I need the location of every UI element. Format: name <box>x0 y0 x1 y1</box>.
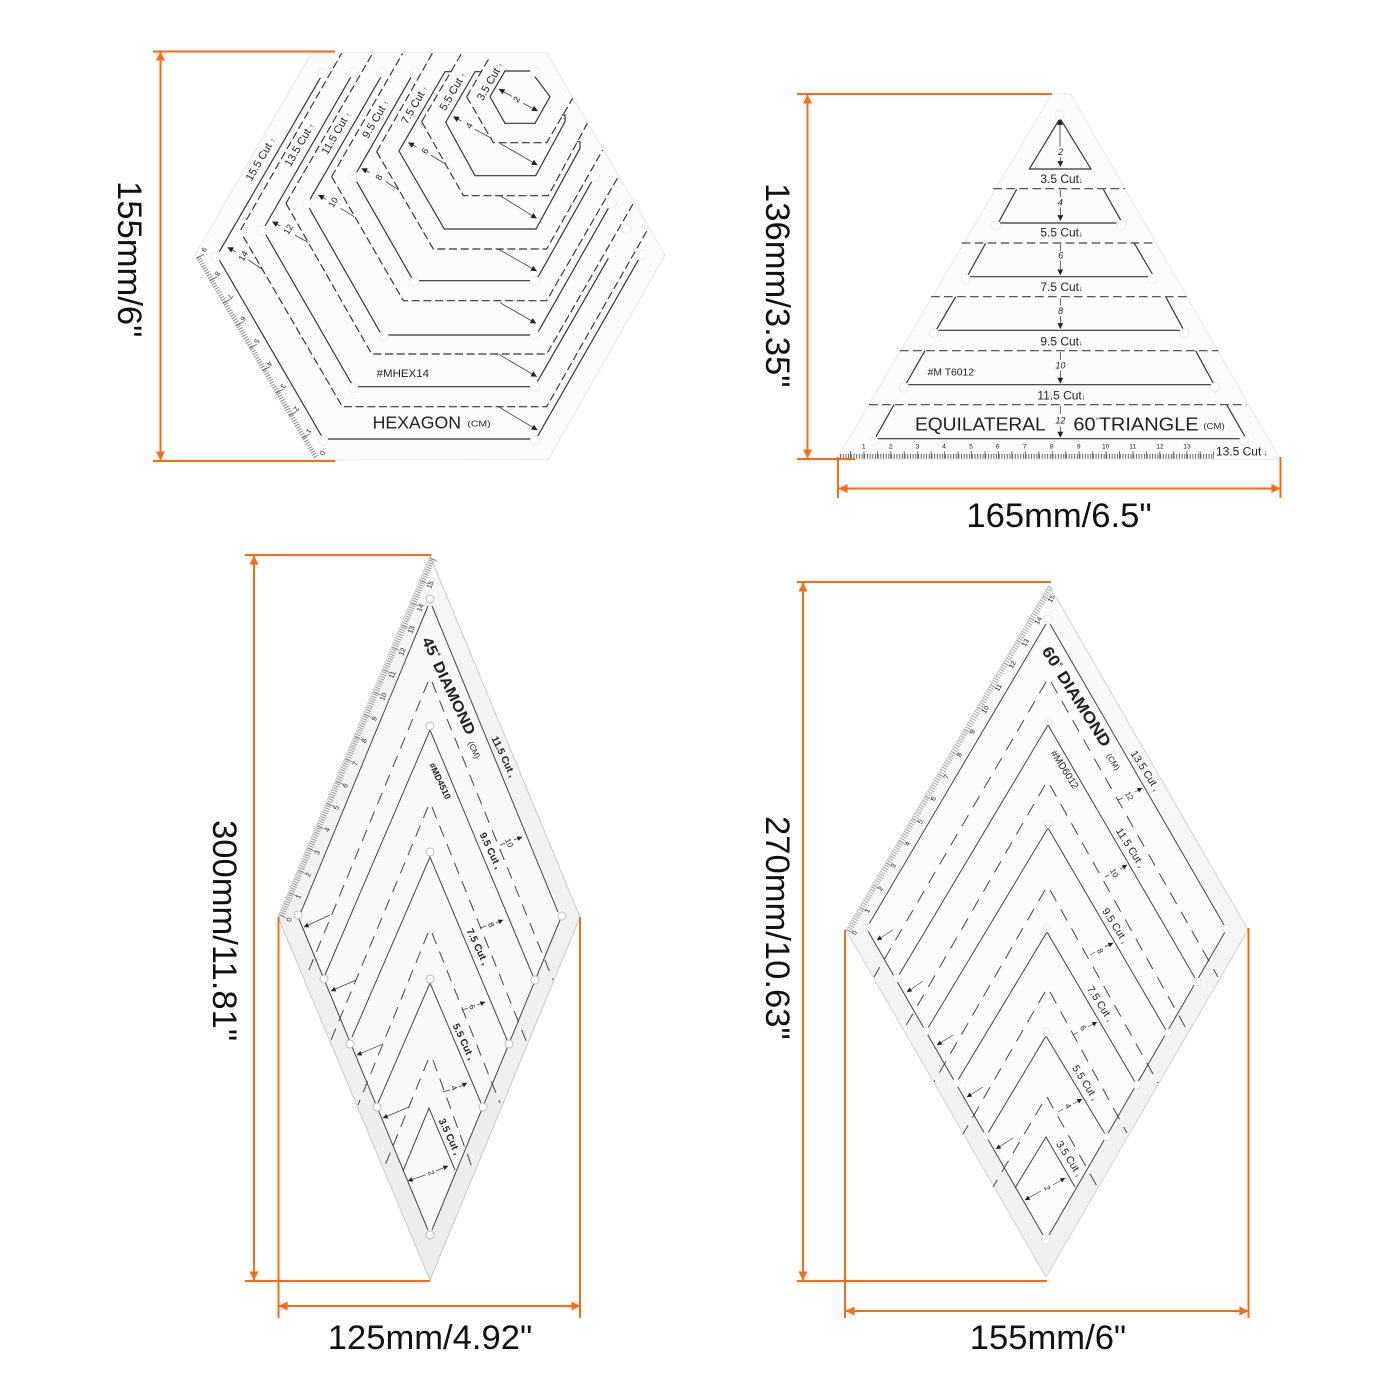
triangle ruler numbers: 8 <box>1050 443 1054 450</box>
60 diamond width numbers: 8 <box>1095 947 1105 956</box>
60 diamond ruler numbers: 2 <box>877 885 885 892</box>
60 diamond ruler numbers: 8 <box>956 751 964 758</box>
60 diamond width arrows <box>877 788 1142 1200</box>
hexagon ruler numbers: 4 <box>265 360 273 367</box>
45 diamond ruler numbers: 2 <box>305 872 313 878</box>
hexagon width numbers: 8 <box>373 173 385 182</box>
dimension: triangle width <box>838 457 1280 535</box>
hexagon width arrows <box>228 89 538 430</box>
45 diamond cut labels: 7.5 Cut , <box>464 927 490 967</box>
60 diamond width numbers: 6 <box>1078 1024 1088 1033</box>
60 diamond cut labels: 13.5 Cut , <box>1128 749 1162 793</box>
60 diamond outline <box>846 585 1248 1277</box>
45 diamond ruler numbers: 10 <box>379 692 389 702</box>
45 diamond ruler numbers: 7 <box>352 761 360 767</box>
60 diamond ruler numbers: 6 <box>930 795 938 802</box>
45 diamond title: 45 <box>418 635 441 657</box>
triangle cut labels: 13.5 Cut ↓ <box>1216 444 1268 458</box>
panel: 60 degree diamond ruler <box>846 585 1248 1277</box>
60 diamond ruler numbers: 9 <box>969 728 977 735</box>
60 diamond ruler numbers: 5 <box>917 818 925 825</box>
45 diamond cut labels: 11.5 Cut , <box>489 735 518 779</box>
45 diamond title: DIAMOND <box>427 654 479 738</box>
hexagon unit: (CM) <box>467 419 491 429</box>
60 diamond ruler numbers <box>851 594 1057 936</box>
hexagon width numbers: 2 <box>511 95 522 104</box>
60 diamond cut labels: 11.5 Cut , <box>1113 826 1147 870</box>
60 diamond title: ° <box>1055 661 1065 669</box>
45 diamond ruler numbers: 13 <box>407 625 417 635</box>
dimension: triangle height <box>758 94 1052 459</box>
dimension: hexagon height <box>110 52 335 461</box>
45 diamond ruler numbers: 9 <box>371 716 379 722</box>
hexagon ruler numbers: 8 <box>213 270 221 277</box>
60 diamond width numbers <box>1042 790 1135 1193</box>
triangle unit: (CM) <box>1203 421 1225 431</box>
45 diamond width numbers: 10 <box>503 837 515 849</box>
triangle title left: EQUILATERAL <box>915 413 1046 434</box>
60 diamond ruler numbers: 4 <box>904 840 912 847</box>
60 diamond width numbers: 4 <box>1063 1102 1073 1111</box>
hexagon cut labels: 11.5 Cut ↑ <box>320 110 354 157</box>
triangle ruler numbers: 11 <box>1129 443 1136 450</box>
triangle title right: ° <box>1096 415 1099 424</box>
hexagon cut labels <box>244 60 506 183</box>
hexagon cut labels: 7.5 Cut ↑ <box>399 84 431 126</box>
45 diamond ruler numbers: 14 <box>416 603 426 613</box>
hexagon cut labels: 5.5 Cut ↑ <box>438 70 469 113</box>
45 diamond ruler numbers: 1 <box>295 894 303 900</box>
dimension: triangle height: 136mm/3.35" <box>758 183 796 387</box>
triangle model number: #M T6012 <box>928 368 974 379</box>
triangle ruler numbers <box>862 443 1191 450</box>
triangle outline <box>837 94 1280 459</box>
triangle height numbers: 4 <box>1058 198 1063 208</box>
45 diamond ruler numbers: 4 <box>324 827 332 833</box>
panel: triangle ruler <box>837 94 1280 459</box>
45 diamond model number: #MD4510 <box>427 761 453 801</box>
hexagon ruler scale <box>198 256 318 458</box>
60 diamond model number: #MD6012 <box>1048 749 1081 792</box>
dimension: 60 diamond height <box>758 582 1051 1281</box>
hexagon cut labels: 9.5 Cut ↑ <box>360 98 392 141</box>
45 diamond ruler numbers: 0 <box>286 917 294 923</box>
hexagon cut labels: 13.5 Cut ↑ <box>283 121 317 169</box>
60 diamond ruler numbers: 10 <box>981 705 991 715</box>
45 diamond cut labels: 5.5 Cut , <box>450 1022 476 1062</box>
hexagon ruler numbers: 6 <box>238 315 246 322</box>
triangle ruler numbers: 12 <box>1156 443 1164 450</box>
45 diamond width numbers: 4 <box>449 1084 459 1092</box>
triangle height numbers: 6 <box>1058 250 1063 260</box>
60 diamond cut labels: 3.5 Cut , <box>1053 1139 1085 1179</box>
hexagon ruler numbers: 0 <box>318 449 326 456</box>
45 diamond mounting holes <box>294 595 566 1239</box>
hexagon width numbers: 4 <box>464 121 475 130</box>
60 diamond cut labels: 7.5 Cut , <box>1084 984 1116 1024</box>
45 diamond width numbers <box>426 837 515 1177</box>
45 diamond ruler numbers: 5 <box>333 805 341 811</box>
45 diamond ruler numbers <box>286 580 436 923</box>
60 diamond ruler scale <box>849 587 1052 932</box>
hexagon ruler numbers <box>199 246 326 456</box>
hexagon cut labels: 15.5 Cut ↑ <box>244 135 278 183</box>
60 diamond ruler numbers: 0 <box>851 929 859 936</box>
60 diamond solid cut lines <box>868 624 1225 1235</box>
60 diamond width numbers: 2 <box>1042 1184 1052 1193</box>
60 diamond ruler numbers: 11 <box>994 683 1004 693</box>
60 diamond width numbers: 10 <box>1108 867 1120 880</box>
45 diamond cut labels: 3.5 Cut , <box>436 1117 462 1157</box>
triangle ruler numbers: 1 <box>862 443 866 450</box>
hexagon width numbers: 6 <box>419 146 431 156</box>
45 diamond ruler numbers: 11 <box>388 670 398 680</box>
45 diamond cut labels: 9.5 Cut , <box>477 831 503 871</box>
hexagon width numbers: 14 <box>237 249 250 263</box>
45 diamond solid cut lines <box>299 606 560 1230</box>
45 diamond outline <box>278 556 580 1280</box>
hexagon ruler numbers: 5 <box>252 337 260 344</box>
triangle height numbers: 10 <box>1055 361 1065 371</box>
45 diamond ruler numbers: 6 <box>342 783 350 789</box>
triangle ruler scale <box>840 455 1214 456</box>
triangle ruler numbers: 9 <box>1077 443 1081 450</box>
triangle ruler numbers: 6 <box>996 443 1000 450</box>
45 diamond ruler numbers: 3 <box>314 850 322 856</box>
dimension: 60 diamond width: 155mm/6" <box>970 1319 1126 1357</box>
panel: 45 degree diamond ruler <box>278 556 580 1280</box>
45 diamond ruler numbers: 12 <box>398 647 408 657</box>
60 diamond cut labels: 5.5 Cut , <box>1069 1063 1101 1103</box>
triangle title right: TRIANGLE <box>1099 413 1199 434</box>
45 diamond width numbers: 8 <box>486 921 496 929</box>
triangle ruler numbers: 4 <box>942 443 946 450</box>
dimension: hexagon height: 155mm/6" <box>110 181 148 337</box>
dimension: 60 diamond width <box>845 928 1248 1357</box>
triangle ruler numbers: 2 <box>889 443 893 450</box>
hexagon ruler numbers: 2 <box>292 405 300 412</box>
triangle height arrows <box>1059 119 1062 437</box>
hexagon title: HEXAGON <box>373 412 461 432</box>
triangle height numbers: 12 <box>1055 415 1065 425</box>
60 diamond ruler numbers: 3 <box>890 862 898 869</box>
dimension: 45 diamond height: 300mm/11.81" <box>205 820 243 1041</box>
60 diamond ruler numbers: 12 <box>1008 660 1018 670</box>
dimension: triangle width: 165mm/6.5" <box>966 497 1152 535</box>
60 diamond ruler numbers: 14 <box>1034 616 1044 626</box>
triangle cut labels: 11.5 Cut↓ <box>1037 389 1086 403</box>
60 diamond ruler numbers: 7 <box>943 773 951 780</box>
hexagon width numbers <box>237 95 522 263</box>
60 diamond ruler numbers: 1 <box>864 907 872 914</box>
60 diamond width numbers: 12 <box>1123 790 1135 803</box>
60 diamond inner area <box>867 619 1227 1240</box>
triangle cut labels: 9.5 Cut↓ <box>1040 334 1083 348</box>
dimension: 45 diamond height <box>205 555 431 1281</box>
triangle cut labels: 5.5 Cut↓ <box>1040 226 1083 240</box>
hexagon cut labels: 3.5 Cut ↑ <box>475 60 506 103</box>
45 diamond width numbers: 6 <box>467 1003 477 1011</box>
45 diamond width arrows <box>304 837 522 1181</box>
triangle ruler numbers: 3 <box>915 443 919 450</box>
triangle mounting holes <box>869 110 1249 446</box>
hexagon ruler numbers: 9 <box>199 246 207 253</box>
hexagon model number: #MHEX14 <box>377 368 429 380</box>
hexagon mounting holes <box>211 67 646 445</box>
triangle ruler numbers: 13 <box>1183 443 1191 450</box>
45 diamond inner area <box>298 604 562 1235</box>
hexagon dashed seam lines <box>241 53 648 407</box>
60 diamond ruler numbers: 15 <box>1047 594 1057 604</box>
triangle ruler numbers: 5 <box>969 443 973 450</box>
60 diamond title: 60 <box>1038 644 1062 668</box>
60 diamond mounting holes <box>863 615 1231 1244</box>
60 diamond dashed seam lines <box>874 682 1218 1188</box>
triangle ruler numbers: 7 <box>1023 443 1027 450</box>
triangle title right: 60 <box>1073 413 1094 434</box>
triangle height numbers: 8 <box>1058 306 1063 316</box>
triangle ruler numbers: 10 <box>1102 443 1110 450</box>
60 diamond cut labels <box>1053 749 1162 1179</box>
45 diamond ruler scale <box>282 558 434 917</box>
triangle cut labels: 7.5 Cut↓ <box>1040 280 1083 294</box>
45 diamond unit: (CM) <box>466 740 482 760</box>
triangle solid cut lines <box>876 118 1245 439</box>
hexagon ruler numbers: 1 <box>304 427 312 434</box>
60 diamond ruler numbers: 13 <box>1021 638 1031 648</box>
hexagon width numbers: 12 <box>282 223 295 236</box>
hexagon ruler numbers: 3 <box>278 382 286 389</box>
dimension: 45 diamond width: 125mm/4.92" <box>328 1319 532 1357</box>
dimension: 45 diamond width <box>278 917 580 1357</box>
triangle height numbers: 2 <box>1057 147 1063 157</box>
panel: hexagon ruler <box>195 53 665 460</box>
hexagon outline <box>195 53 665 460</box>
45 diamond width numbers: 2 <box>426 1169 436 1177</box>
triangle cut labels <box>1037 172 1268 458</box>
45 diamond cut labels <box>436 735 518 1157</box>
triangle cut labels: 3.5 Cut↓ <box>1040 172 1083 186</box>
45 diamond ruler numbers: 8 <box>361 738 369 744</box>
60 diamond title: DIAMOND <box>1051 664 1114 750</box>
60 diamond unit: (CM) <box>1104 752 1122 772</box>
hexagon solid cut lines <box>219 71 638 439</box>
dimension: 60 diamond height: 270mm/10.63" <box>758 816 796 1040</box>
45 diamond dashed seam lines <box>306 682 553 1170</box>
hexagon width numbers: 10 <box>327 196 340 209</box>
hexagon ruler numbers: 7 <box>225 293 233 300</box>
45 diamond title: ° <box>433 651 443 658</box>
60 diamond cut labels: 9.5 Cut , <box>1099 906 1131 946</box>
45 diamond ruler numbers: 15 <box>426 580 436 590</box>
triangle height numbers <box>1055 147 1065 425</box>
triangle dashed seam lines <box>869 189 1247 405</box>
